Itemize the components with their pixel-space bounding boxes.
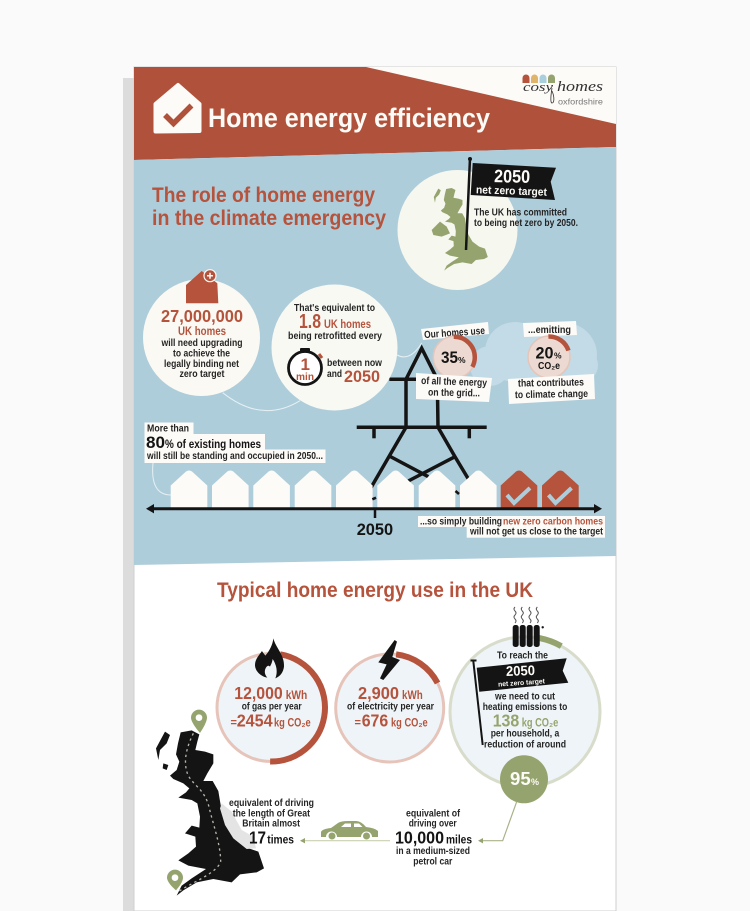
donut: 20%: % xyxy=(554,350,562,360)
callout: 27,000,000 homes: zero target xyxy=(180,369,225,380)
connector lines xyxy=(153,337,523,495)
callout: emitting 20%: to climate change xyxy=(515,389,588,401)
timeline arrow xyxy=(146,504,602,539)
gauge: gas use: 12,000 xyxy=(234,683,283,703)
icon: car xyxy=(321,821,378,840)
donut: 20%: CO₂e xyxy=(538,361,560,372)
text: 10,000 miles: equivalent of xyxy=(406,809,460,820)
label: new zero carbon homes: new zero carbon homes xyxy=(503,516,603,528)
badge: 95%: % xyxy=(531,777,539,787)
callout: 27,000,000 homes: legally binding net xyxy=(164,359,239,370)
text: 10,000 miles: petrol car xyxy=(413,856,452,867)
callout: heating emissions target: we need to cut xyxy=(494,691,555,702)
heading: typical home energy use: Typical home energy use in the UK xyxy=(217,578,533,602)
gauge: electricity use xyxy=(330,640,450,768)
panel: header banner xyxy=(134,67,616,160)
icon: house with check xyxy=(156,85,200,132)
callout: 1.8 homes every minute: 2050 xyxy=(344,367,380,386)
text: 10,000 miles xyxy=(395,809,472,867)
timeline arrow: 2050 xyxy=(357,521,393,539)
flag: 2050 target: net zero target xyxy=(498,678,546,689)
cloud xyxy=(470,322,598,390)
flag: 2050 net zero target xyxy=(466,157,556,250)
callout: emitting 20%: ...emitting xyxy=(528,325,571,336)
text: length of Great Britain: Britain almost xyxy=(242,819,300,830)
title: Home energy efficiency xyxy=(208,103,490,133)
logo: cosy homes oxfordshire: oxfordshire xyxy=(558,97,603,107)
gauge: gas use xyxy=(208,638,334,770)
callout: 27,000,000 homes: UK homes xyxy=(178,326,226,338)
badge: 95% xyxy=(500,755,548,803)
callout: heating emissions target: 138 xyxy=(493,711,520,731)
label: new zero carbon homes: ...so simply building xyxy=(420,516,502,528)
label: 80% of existing homes: 80 xyxy=(146,434,165,452)
gauge: electricity use: of electricity per year xyxy=(347,701,434,712)
callout: heating emissions target xyxy=(437,607,613,803)
callout: homes use 35%: Our homes use xyxy=(424,326,486,341)
text: 10,000 miles: in a medium-sized xyxy=(396,846,470,857)
text: 10,000 miles: 10,000 xyxy=(395,827,444,847)
flag: 2050 net zero target: net zero target xyxy=(476,184,547,199)
arrow: 95% to miles xyxy=(478,802,517,843)
icon: lightning bolt xyxy=(378,640,400,680)
label: 80% of existing homes: More than xyxy=(147,424,189,434)
callout: emitting 20% xyxy=(508,321,595,404)
net zero target map circle xyxy=(398,157,578,290)
row of houses xyxy=(171,470,497,508)
gauge: electricity use: kg CO₂e xyxy=(391,718,428,730)
text: length of Great Britain: times xyxy=(267,834,294,846)
donut: 20% xyxy=(528,336,570,378)
label: 80% of existing homes: % of existing homes xyxy=(165,439,261,451)
heading: role of home energy xyxy=(152,183,386,230)
text: length of Great Britain: the length of Great xyxy=(233,808,310,819)
heading: role of home energy: in the climate emergency xyxy=(152,206,386,230)
logo: cosy homes oxfordshire xyxy=(522,74,603,107)
callout: heating emissions target: kg CO₂e xyxy=(522,718,558,730)
map: UK black with route xyxy=(156,710,264,896)
donut: 35% xyxy=(433,336,475,378)
callout: heating emissions target: per household, a xyxy=(491,729,560,740)
text: length of Great Britain: 17 xyxy=(249,827,266,847)
gauge: gas use: 2454 xyxy=(237,711,273,731)
logo: cosy homes oxfordshire: cosy xyxy=(523,79,553,94)
icon: radiator xyxy=(513,607,544,647)
label: 80% of existing homes: will still be standing and occupied in 2050... xyxy=(146,451,323,462)
callout: 27,000,000 homes: will need upgrading xyxy=(161,338,242,349)
icon: bottom location pin xyxy=(167,870,183,890)
donut: 35%: % xyxy=(458,355,466,365)
gauge: electricity use: = xyxy=(354,717,361,729)
callout: heating emissions target: To reach the xyxy=(497,650,548,661)
donut: 20%: 20 xyxy=(536,344,554,362)
text: 10,000 miles: driving over xyxy=(409,819,457,830)
label: new zero carbon homes: will not get us close to the target xyxy=(469,527,603,538)
driving route xyxy=(178,733,221,892)
flag: 2050 target: 2050 xyxy=(506,662,535,679)
callout: 1.8 homes every minute: That's equivalent to xyxy=(294,303,375,314)
callout: emitting 20%: that contributes xyxy=(518,377,584,390)
callout: 27,000,000 homes xyxy=(143,270,260,396)
gauge: gas use: = xyxy=(230,717,237,729)
panel: climate emergency xyxy=(134,147,616,565)
callout: 1.8 homes every minute: being retrofitted every xyxy=(288,331,382,342)
callout: 1.8 homes every minute: between now xyxy=(327,358,383,369)
text: length of Great Britain xyxy=(229,798,314,847)
pylon remnants between houses xyxy=(372,491,459,499)
callout: heating emissions target: heating emissions to xyxy=(483,702,567,713)
panel: typical home energy use xyxy=(156,578,613,896)
label: 80% of existing homes xyxy=(144,422,326,463)
label: new zero carbon homes xyxy=(418,516,605,538)
text: 10,000 miles: miles xyxy=(446,834,472,846)
icon: stopwatch xyxy=(288,348,322,384)
text: length of Great Britain: equivalent of driving xyxy=(229,798,314,809)
donut: 35%: 35 xyxy=(441,349,458,367)
text: UK commitment: The UK has committed xyxy=(474,208,567,218)
icon: stopwatch: 1 xyxy=(300,355,310,374)
callout: heating emissions target: reduction of around xyxy=(484,739,566,750)
icon: stopwatch: min xyxy=(296,371,314,383)
callout: 27,000,000 homes: 27,000,000 xyxy=(161,306,243,326)
callout: 1.8 homes every minute xyxy=(272,284,398,410)
logo: cosy homes oxfordshire: homes xyxy=(557,79,603,95)
text: UK commitment xyxy=(474,208,578,229)
gauge: gas use: of gas per year xyxy=(242,701,302,712)
new zero carbon houses xyxy=(501,470,579,508)
callout: homes use 35%: on the grid... xyxy=(428,388,480,399)
callout: 1.8 homes every minute: 1.8 xyxy=(299,311,321,333)
gauge: electricity use: 676 xyxy=(362,711,389,731)
arrow: car to map xyxy=(300,838,390,843)
gauge: gas use: kg CO₂e xyxy=(274,718,311,730)
callout: 1.8 homes every minute: and xyxy=(327,369,342,380)
heading: role of home energy: The role of home energy xyxy=(152,183,375,207)
icon: top location pin xyxy=(191,710,207,733)
icon: flame xyxy=(255,638,284,678)
gauge: electricity use: 2,900 xyxy=(358,683,399,703)
map: UK green xyxy=(432,188,488,271)
flag: 2050 target xyxy=(470,658,568,745)
icon: house with plus xyxy=(186,270,218,303)
power pylon xyxy=(357,348,487,498)
text: UK commitment: to being net zero by 2050. xyxy=(474,218,578,229)
gauge: electricity use: kWh xyxy=(402,690,423,702)
callout: 1.8 homes every minute: UK homes xyxy=(324,317,371,331)
callout: 27,000,000 homes: to achieve the xyxy=(173,348,230,360)
callout: homes use 35%: of all the energy xyxy=(421,376,487,389)
grey patch over east anglia xyxy=(220,803,256,849)
badge: 95%: 95 xyxy=(510,769,531,789)
callout: homes use 35% xyxy=(416,322,492,402)
flag: 2050 net zero target: 2050 xyxy=(494,166,530,187)
gauge: gas use: kWh xyxy=(286,690,307,702)
